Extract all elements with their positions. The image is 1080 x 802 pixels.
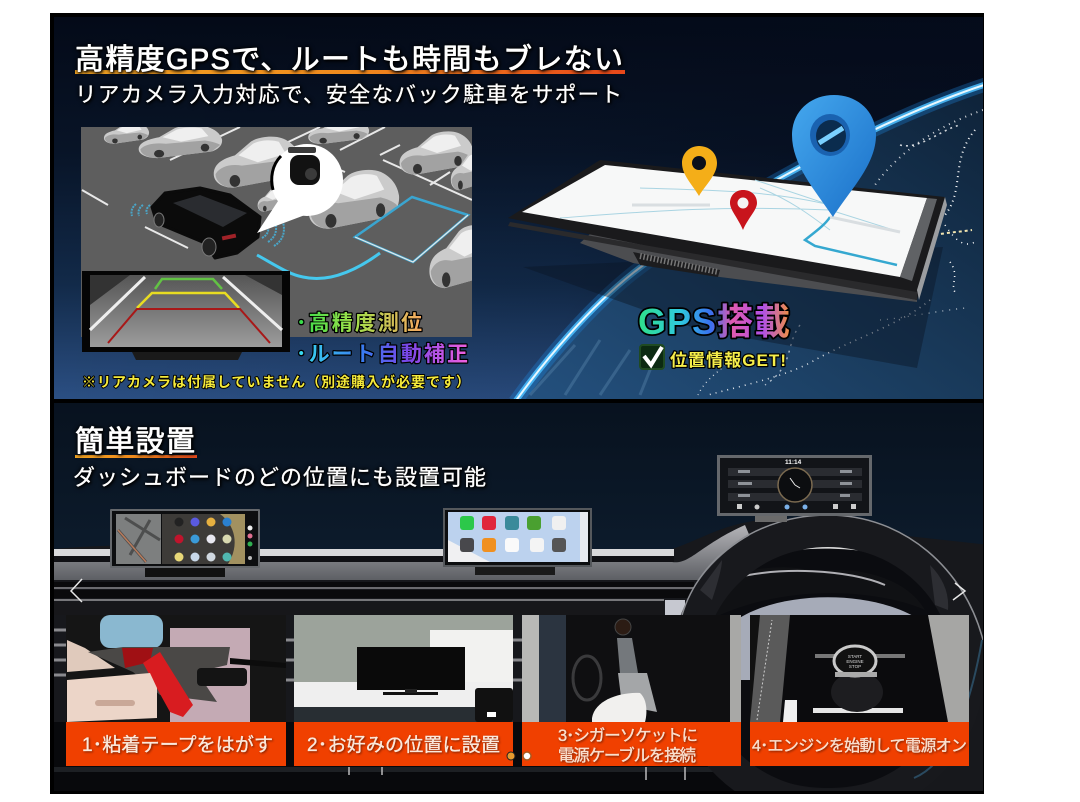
step 4 label: 4･エンジンを始動して電源オン xyxy=(752,737,967,755)
icon: large blue pin xyxy=(792,95,876,217)
step 2 label: 2･お好みの位置に設置 xyxy=(307,734,500,756)
camera callout bubble xyxy=(257,144,343,233)
device with map xyxy=(508,160,947,368)
step 3 label: 3･シガーソケットに xyxy=(558,726,698,745)
icon: red pin xyxy=(730,190,757,230)
step 3 photo xyxy=(522,615,741,722)
subtitle: リアカメラ入力対応で、安全なバック駐車をサポート xyxy=(75,83,622,107)
parking slot and route xyxy=(257,197,468,279)
step 4 photo: STOP xyxy=(849,664,861,669)
step 1 label: 1･粘着テープをはがす xyxy=(82,734,273,756)
step 4 photo: ENGINE xyxy=(846,659,864,664)
feature label: high precision positioning: ･高精度測位 xyxy=(296,312,422,335)
panel: easy installation xyxy=(50,400,990,802)
title: 高精度GPSで、ルートも時間もブレない xyxy=(75,43,623,76)
feature label: automatic route correction: ･ルート自動補正 xyxy=(296,343,468,366)
parked cars xyxy=(104,127,472,288)
step 2: place in preferred position xyxy=(294,615,513,766)
panel: high-precision GPS xyxy=(50,13,990,402)
carousel dots xyxy=(507,752,531,760)
dashboard xyxy=(54,515,990,802)
note: rear camera not included: ※リアカメラは付属していません（別途購入が必要です） xyxy=(82,374,470,390)
step 3 label: 電源ケーブルを接続 xyxy=(558,745,696,765)
step 1 photo xyxy=(66,615,286,722)
subtitle: ダッシュボードのどの位置にも設置可能 xyxy=(73,465,486,490)
arrow: previous xyxy=(71,579,82,602)
step 4: start engine xyxy=(750,615,969,766)
step 4 photo: START xyxy=(848,654,862,659)
device: clock dashboard: 11:14 xyxy=(785,459,802,466)
icon: yellow pin xyxy=(682,146,717,196)
badge: GPS equipped: GPS搭載 xyxy=(638,301,790,342)
step 1: remove adhesive tape xyxy=(66,615,286,766)
arrow: next xyxy=(953,583,965,600)
steering wheel xyxy=(682,515,983,802)
black suv xyxy=(132,188,284,258)
earth with atmosphere arc xyxy=(515,83,990,402)
step 4 photo xyxy=(750,615,969,722)
device: clock dashboard xyxy=(717,455,872,522)
icon: checkmark xyxy=(640,345,664,369)
label: location info: 位置情報GET! xyxy=(670,351,786,370)
device: carplay screen xyxy=(443,508,592,575)
step 3: connect power cable xyxy=(522,615,741,766)
step 2 photo xyxy=(294,615,513,722)
rear-view monitor xyxy=(82,271,290,360)
illustration: parking lot with rear camera xyxy=(81,119,498,337)
title: 簡単設置 xyxy=(75,425,195,458)
device: android map screen xyxy=(110,509,260,577)
